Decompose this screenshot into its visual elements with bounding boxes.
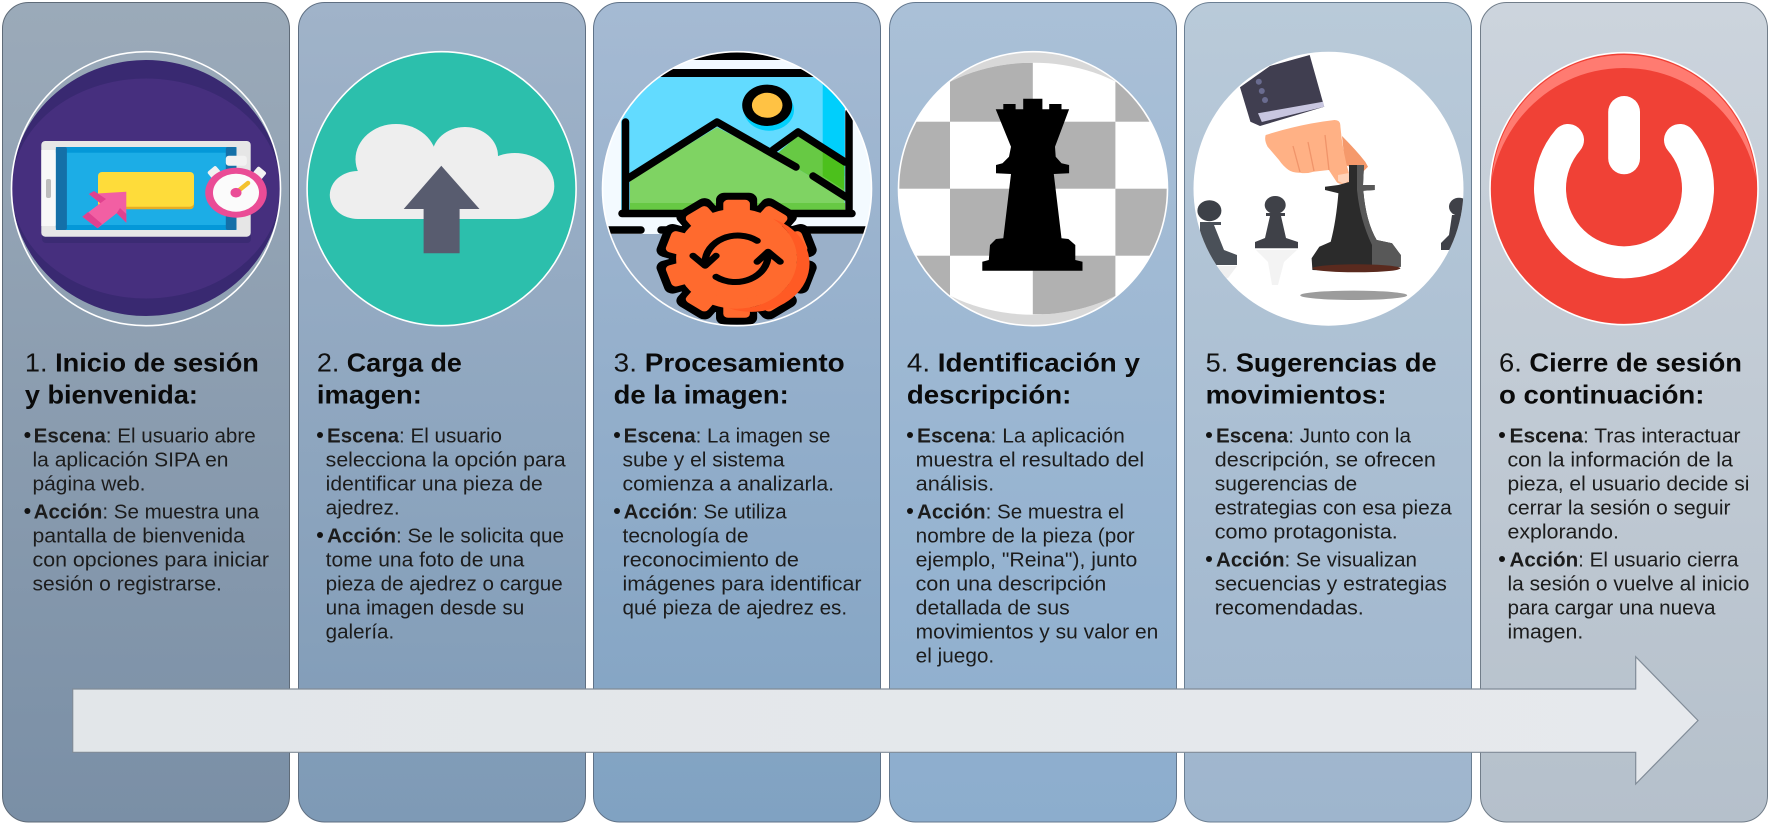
heading: step 4: descripción: <box>907 380 1071 410</box>
text block: step 2: ajedrez. <box>326 498 400 520</box>
text block: step 1: Escena: El usuario abre <box>34 426 256 448</box>
text block: step 6 <box>1499 426 1749 644</box>
text block: step 1: con opciones para iniciar <box>32 550 269 572</box>
text block: step 1: página web. <box>32 474 146 496</box>
text block: step 2 <box>317 426 567 644</box>
text block: step 4 <box>907 426 1158 668</box>
text block: step 1: pantalla de bienvenida <box>32 526 246 548</box>
text block: step 3: comienza a analizarla. <box>622 474 834 496</box>
heading: step 2: 2. Carga de <box>317 348 462 378</box>
text block: step 4: movimientos y su valor en <box>916 622 1158 644</box>
icon: power button <box>1490 53 1758 325</box>
text block: step 5: como protagonista. <box>1215 522 1398 544</box>
text block: step 5 <box>1206 426 1453 620</box>
icon: chess rook on checkerboard <box>895 50 1171 328</box>
text block: step 1 <box>24 426 269 596</box>
text block: step 5: sugerencias de <box>1215 474 1357 496</box>
text block: step 2: identificar una pieza de <box>326 474 543 496</box>
text block: step 3: imágenes para identificar <box>622 574 862 596</box>
text block: step 4: Escena: La aplicación <box>917 426 1125 448</box>
heading: step 3 <box>614 348 845 410</box>
text block: step 5: Acción: Se visualizan <box>1216 550 1417 572</box>
icon: hand moving chess piece <box>1194 52 1469 326</box>
text block: step 2: una imagen desde su <box>326 598 524 620</box>
heading: step 5: 5. Sugerencias de <box>1206 348 1437 378</box>
text block: step 4: ejemplo, "Reina"), junto <box>916 550 1137 572</box>
text block: step 3: Escena: La imagen se <box>624 426 830 448</box>
text block: step 5: estrategias con esa pieza <box>1215 498 1453 520</box>
heading: step 6: o continuación: <box>1499 380 1704 410</box>
text block: step 6: para cargar una nueva <box>1508 598 1716 620</box>
text block: step 6: cerrar la sesión o seguir <box>1508 498 1731 520</box>
icon: phone with stopwatch <box>12 52 280 326</box>
heading: step 6 <box>1499 348 1742 410</box>
text block: step 1: sesión o registrarse. <box>32 574 222 596</box>
text block: step 4: nombre de la pieza (por <box>916 526 1135 548</box>
heading: step 3: 3. Procesamiento <box>614 348 845 378</box>
heading: step 1: y bienvenida: <box>25 380 198 410</box>
icon: cloud upload <box>307 52 576 326</box>
heading: step 3: de la imagen: <box>614 380 789 410</box>
text block: step 4: detallada de sus <box>916 598 1070 620</box>
icon: image processing gear <box>600 52 875 334</box>
heading: step 1 <box>25 348 259 410</box>
text block: step 3: qué pieza de ajedrez es. <box>622 598 847 620</box>
text block: step 4: Acción: Se muestra el <box>917 502 1124 524</box>
text block: step 3 <box>614 426 862 620</box>
text block: step 6: Escena: Tras interactuar <box>1510 426 1741 448</box>
text block: step 2: Escena: El usuario <box>327 426 502 448</box>
text block: step 2: selecciona la opción para <box>326 450 567 472</box>
text block: step 6: imagen. <box>1508 622 1583 644</box>
text block: step 2: pieza de ajedrez o cargue <box>326 574 563 596</box>
text block: step 4: análisis. <box>916 474 994 496</box>
panel: step 1 <box>2 2 290 822</box>
heading: step 2 <box>317 348 462 410</box>
panel: step 3 <box>594 2 880 822</box>
text block: step 3: sube y el sistema <box>622 450 785 472</box>
heading: step 6: 6. Cierre de sesión <box>1499 348 1742 378</box>
text block: step 2: galería. <box>326 622 394 644</box>
panel: step 2 <box>298 2 586 822</box>
text block: step 2: Acción: Se le solicita que <box>327 526 564 548</box>
heading: step 4: 4. Identificación y <box>907 348 1140 378</box>
heading: step 1: 1. Inicio de sesión <box>25 348 259 378</box>
heading: step 4 <box>907 348 1140 410</box>
text block: step 4: muestra el resultado del <box>916 450 1144 472</box>
text block: step 1: la aplicación SIPA en <box>32 450 228 472</box>
text block: step 6: la sesión o vuelve al inicio <box>1508 574 1749 596</box>
panel: step 5 <box>1184 2 1472 822</box>
text block: step 3: Acción: Se utiliza <box>624 502 788 524</box>
text block: step 3: reconocimiento de <box>622 550 799 572</box>
text block: step 5: recomendadas. <box>1215 598 1364 620</box>
heading: step 2: imagen: <box>317 380 422 410</box>
panel: step 4 <box>890 2 1176 822</box>
text block: step 6: con la información de la <box>1508 450 1734 472</box>
text block: step 6: Acción: El usuario cierra <box>1510 550 1739 572</box>
text block: step 4: con una descripción <box>916 574 1106 596</box>
text block: step 5: descripción, se ofrecen <box>1215 450 1436 472</box>
panel: step 6 <box>1480 2 1768 822</box>
text block: step 1: Acción: Se muestra una <box>34 502 260 524</box>
text block: step 6: explorando. <box>1508 522 1619 544</box>
text block: step 5: secuencias y estrategias <box>1215 574 1447 596</box>
text block: step 3: tecnología de <box>622 526 748 548</box>
heading: step 5: movimientos: <box>1206 380 1387 410</box>
arrow: process timeline <box>73 657 1698 784</box>
text block: step 5: Escena: Junto con la <box>1216 426 1412 448</box>
text block: step 6: pieza, el usuario decide si <box>1508 474 1749 496</box>
text block: step 2: tome una foto de una <box>326 550 525 572</box>
heading: step 5 <box>1206 348 1437 410</box>
text block: step 4: el juego. <box>916 646 994 668</box>
